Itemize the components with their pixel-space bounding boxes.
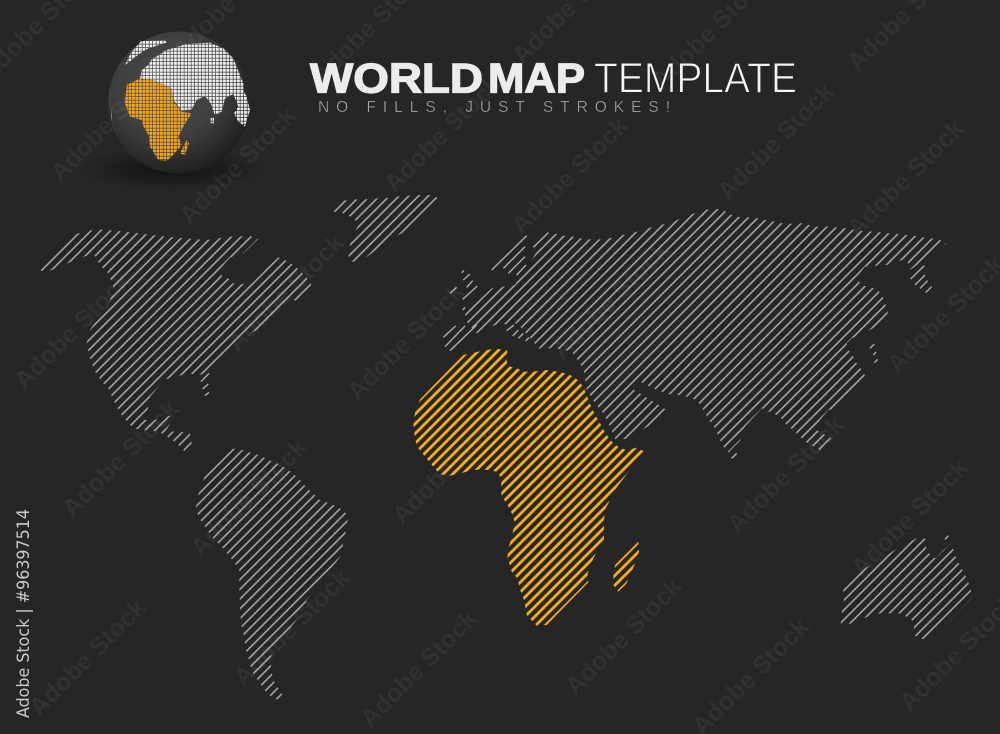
watermark text: Adobe Stock <box>722 411 850 539</box>
Africa mainland <box>413 349 644 626</box>
watermark text: Adobe Stock <box>24 594 152 722</box>
title light part: TEMPLATE <box>594 54 797 102</box>
watermark text: Adobe Stock <box>379 70 507 198</box>
globe sphere <box>108 32 250 174</box>
watermark text: Adobe Stock <box>842 115 970 243</box>
Madagascar <box>613 542 639 592</box>
watermark text: Adobe Stock <box>342 278 470 406</box>
watermark text: Adobe Stock <box>45 59 173 187</box>
watermark text: Adobe Stock <box>228 564 356 692</box>
globe icon <box>108 32 250 174</box>
title word: MAP: MAP <box>488 54 585 102</box>
watermark text: Adobe Stock <box>846 454 974 582</box>
South America <box>196 448 348 702</box>
world map: grey hatched continents <box>39 195 973 702</box>
watermark text: Adobe Stock <box>174 102 302 230</box>
watermark text: Adobe Stock <box>355 605 483 733</box>
Eurasia <box>443 209 947 458</box>
watermark text: Adobe Stock <box>387 402 515 530</box>
side stock id label: Adobe Stock | #96397514 <box>14 509 33 718</box>
watermark text: Adobe Stock <box>712 78 840 206</box>
watermark text: Adobe Stock <box>222 229 350 357</box>
Greenland <box>333 195 440 262</box>
globe shadow <box>77 147 267 191</box>
watermark text: Adobe Stock <box>506 112 634 240</box>
watermark text: Adobe Stock <box>57 395 185 523</box>
globe dotted land <box>110 40 250 161</box>
watermark text: Adobe Stock <box>9 267 137 395</box>
watermark text: Adobe Stock <box>560 573 688 701</box>
Africa highlighted in orange <box>413 349 644 626</box>
title <box>310 54 797 102</box>
watermark text: Adobe Stock <box>185 434 313 562</box>
title word: WORLD: WORLD <box>310 54 483 102</box>
globe Africa <box>125 78 192 161</box>
watermark text: Adobe Stock <box>547 237 675 365</box>
North America <box>39 229 313 453</box>
Australia <box>841 536 973 639</box>
subtitle: NO FILLS, JUST STROKES! <box>318 99 670 116</box>
